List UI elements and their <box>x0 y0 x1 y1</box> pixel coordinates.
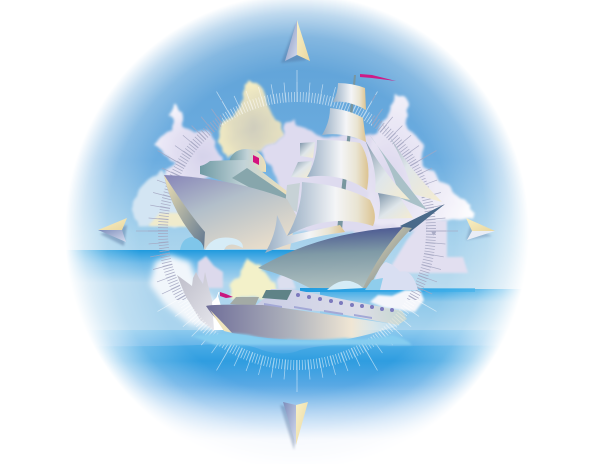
bow wave blue <box>365 278 383 290</box>
clouds: lilac beside yellow <box>277 270 296 290</box>
lavender swell under bow <box>372 262 418 290</box>
bow wave white <box>205 238 243 250</box>
bow wave blue <box>180 237 204 250</box>
sailing ship hull <box>258 227 403 288</box>
yacht long windows <box>264 303 372 319</box>
course sail <box>265 215 345 253</box>
yacht portholes <box>296 293 394 312</box>
small stern sails <box>291 142 315 178</box>
topsail <box>307 140 368 190</box>
far sea strip behind yacht <box>300 288 475 292</box>
main sail <box>287 182 375 236</box>
cruise ship superstructure <box>200 160 288 207</box>
compass tick ring <box>152 86 442 376</box>
cruise ship grey stern block <box>285 183 300 212</box>
jib sail inner <box>368 133 427 210</box>
fore lower sail <box>378 193 413 219</box>
icon: castle towers <box>177 272 218 331</box>
compass point: east <box>466 218 495 240</box>
dark wave under yacht <box>111 344 485 356</box>
clouds: pale yellow strip <box>148 213 195 227</box>
jib sail outer <box>380 120 442 202</box>
bow wave white <box>327 281 363 290</box>
mast <box>337 75 356 230</box>
compass point: west <box>98 218 127 246</box>
clouds: lilac behind sails <box>262 122 425 232</box>
royal sail <box>333 83 366 110</box>
yacht bow highlight <box>210 310 232 333</box>
pennant flag <box>360 74 396 81</box>
cruise ship funnel dome <box>229 149 266 172</box>
fore sail <box>365 140 410 200</box>
yacht hull <box>206 305 400 340</box>
clouds: lower-left pale blue <box>133 170 192 226</box>
cruise ship <box>164 149 300 250</box>
topgallant sail <box>322 108 366 142</box>
yacht bridge window <box>262 290 292 300</box>
clouds: small white right of yacht <box>370 290 424 312</box>
yacht aft deck <box>230 297 259 306</box>
background: faded blue disc <box>68 0 525 440</box>
hull bow edge <box>363 227 412 288</box>
cruise ship bow facet <box>164 175 205 249</box>
cloud puff lilac <box>197 256 223 288</box>
cruise ship funnel marking <box>253 155 259 165</box>
yacht <box>206 289 407 340</box>
yacht flag and pole <box>215 292 233 303</box>
cruise ship hull <box>164 175 296 249</box>
compass point: north <box>281 20 310 63</box>
white shore <box>212 296 228 330</box>
clouds: left lilac-white <box>153 105 226 178</box>
clouds: right white <box>368 93 472 227</box>
clouds: lower right lavender <box>387 220 468 273</box>
cruise ship lower deck <box>232 168 296 210</box>
sailing ship <box>258 74 445 290</box>
bowsprit <box>400 204 445 232</box>
clouds: yellow cumulus <box>218 77 283 158</box>
clouds: lower left white with castle <box>150 255 228 331</box>
light wave at yacht waterline <box>192 333 412 345</box>
compass point: south <box>280 402 308 450</box>
clouds: yellow behind yacht <box>230 258 280 298</box>
yacht superstructure <box>255 289 407 325</box>
